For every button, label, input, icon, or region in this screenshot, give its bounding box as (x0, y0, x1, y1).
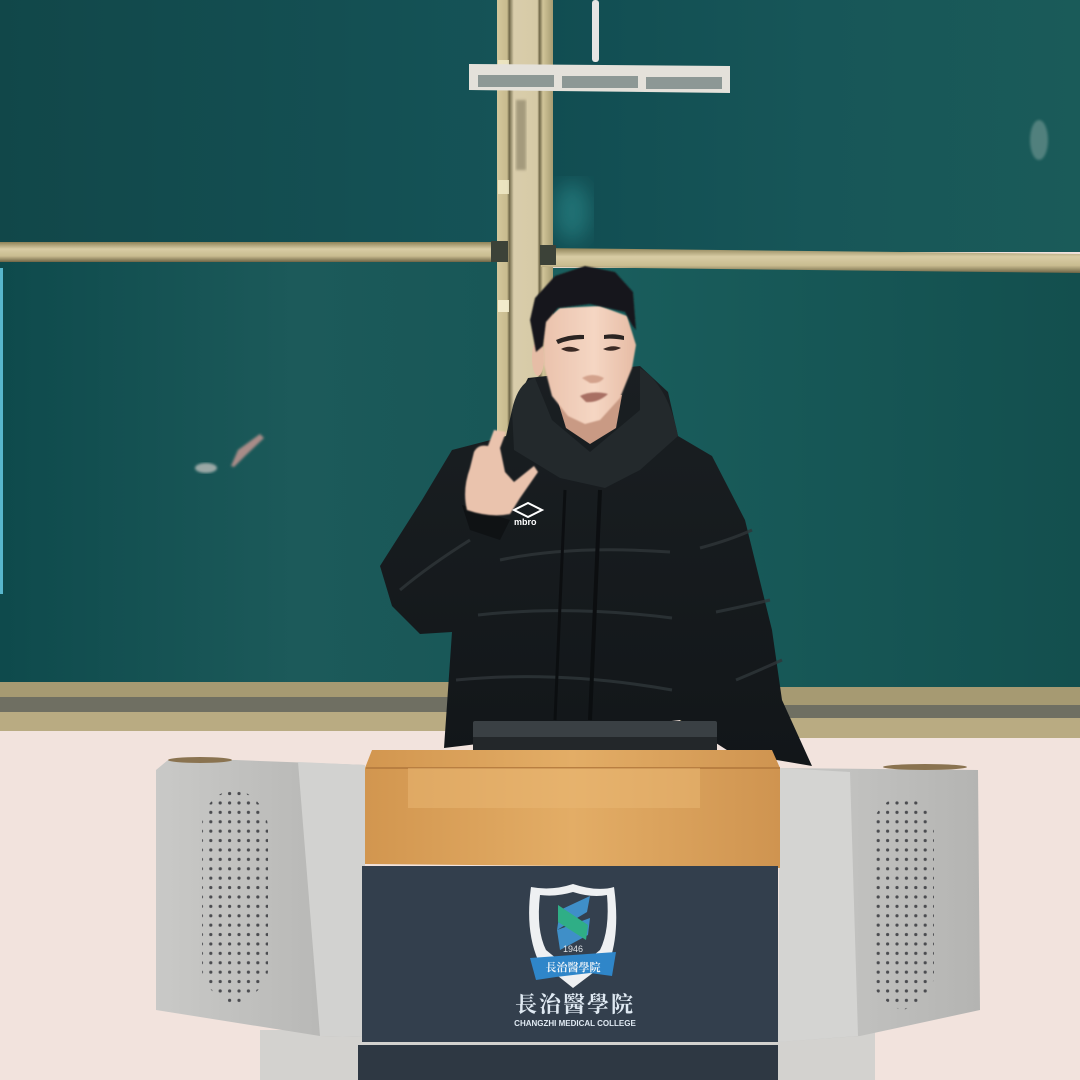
jacket body (380, 366, 812, 766)
college logo: 長治醫學院 (546, 960, 600, 974)
college logo (514, 884, 636, 1028)
panel: top-right chalkboard (552, 0, 1080, 252)
central metal pillar (497, 0, 553, 440)
hood (512, 368, 678, 488)
navy podium front panel (362, 866, 778, 1042)
nose (582, 375, 604, 383)
year: 1946 (563, 944, 583, 954)
sleeve cuff (462, 505, 510, 540)
lower left gold rail (0, 682, 450, 731)
person: lecturer (380, 266, 812, 766)
umbro logo (514, 503, 542, 527)
panel: top-left chalkboard (0, 0, 498, 244)
umbro logo: mbro (514, 517, 537, 527)
ear (532, 340, 544, 376)
eyes (561, 346, 621, 352)
panel: lower-left chalkboard (0, 260, 497, 684)
podium right wing (778, 764, 980, 1042)
wooden podium top (365, 750, 780, 868)
eyebrows (556, 334, 624, 344)
ceiling air vent (469, 64, 730, 93)
college chinese name: 長治醫學院 (515, 988, 635, 1019)
podium left wing (156, 757, 365, 1037)
neck (556, 395, 622, 444)
podium base (260, 1030, 875, 1080)
panel: lower-right chalkboard (552, 268, 1080, 692)
jacket quilting (400, 490, 782, 720)
projector cable (592, 0, 599, 62)
college english name: CHANGZHI MEDICAL COLLEGE (514, 1019, 636, 1028)
hair (530, 266, 636, 352)
upper right gold rail (540, 245, 1080, 273)
speaker grille (871, 794, 934, 1011)
upper left gold rail (0, 241, 508, 262)
face (543, 306, 636, 424)
mouth (580, 392, 608, 402)
speaker grille (202, 787, 268, 1005)
lower right gold rail (680, 687, 1080, 738)
ribbon (530, 952, 616, 980)
hand (465, 430, 538, 515)
shield (529, 884, 616, 988)
helix (557, 896, 590, 950)
wall (0, 728, 1080, 1080)
laptop on podium (473, 721, 717, 753)
